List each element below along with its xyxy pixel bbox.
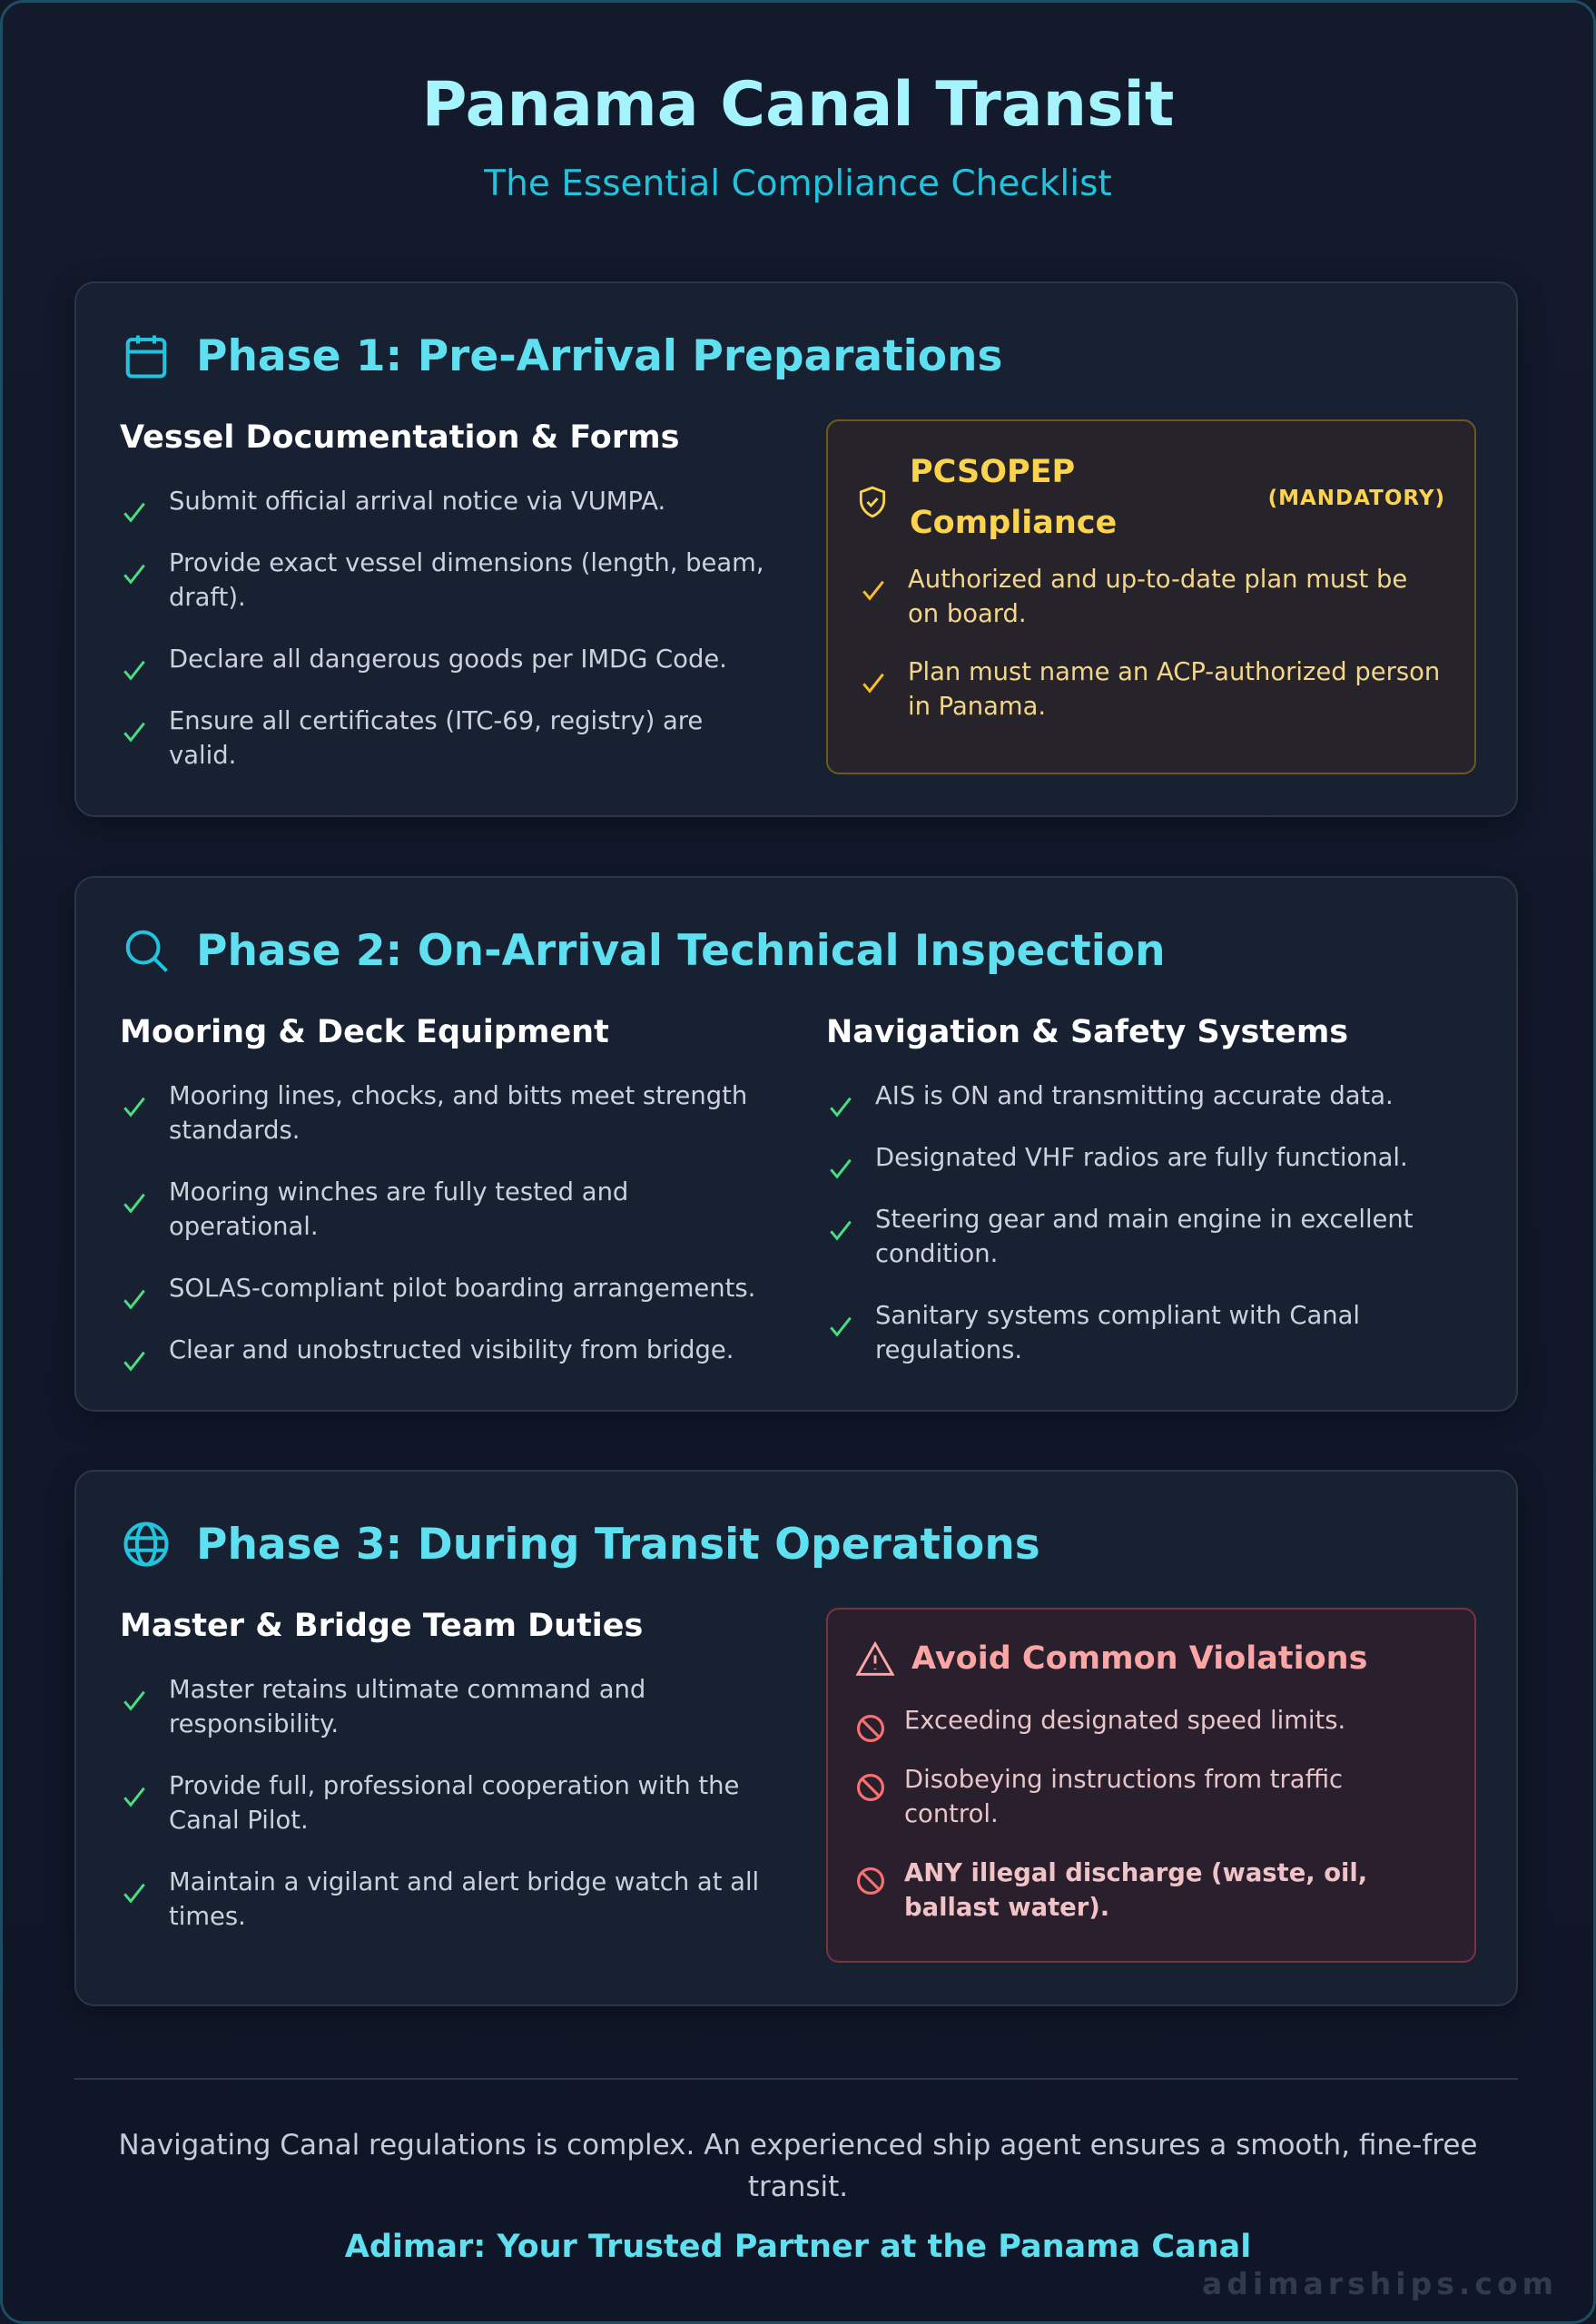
column: mooring: Mooring & Deck Equipment	[120, 1014, 609, 1050]
heading: phase 2: Phase 2: On-Arrival Technical Inspection	[196, 926, 1166, 975]
callout heading: (MANDATORY)	[1268, 487, 1445, 510]
column: master duties: Master & Bridge Team Duties	[120, 1608, 643, 1644]
callout: violations: Disobeying instructions from traffic	[904, 1766, 1343, 1794]
column: master duties: Provide full, professional cooperation with the Canal Pilot.	[169, 1772, 739, 1835]
column: navigation: Steering gear and main engine in excellent condition.	[875, 1206, 1414, 1268]
column: mooring: Clear and unobstructed visibility from bridge.	[169, 1336, 734, 1364]
panel: phase 2	[74, 876, 1518, 1412]
column: navigation: Designated VHF radios are fully functional.	[875, 1144, 1408, 1172]
callout: PCSOPEP: on board.	[908, 600, 1027, 628]
tagline: Adimar: Your Trusted Partner at the Panama Canal	[345, 2229, 1251, 2265]
panel: phase 3	[74, 1470, 1518, 2006]
column: vessel documentation	[120, 419, 764, 770]
column: mooring	[120, 1014, 755, 1371]
callout: violations	[826, 1608, 1476, 1963]
column: mooring: Mooring lines, chocks, and bitts meet strength standards.	[169, 1082, 747, 1145]
footer text: Navigating Canal regulations is complex. An experienced ship agent ensures a smooth, fine-free transit.	[119, 2129, 1477, 2203]
subtitle: The Essential Compliance Checklist	[484, 163, 1112, 204]
callout heading: PCSOPEP	[910, 454, 1075, 490]
callout: violations: control.	[904, 1800, 999, 1828]
callout: PCSOPEP: Authorized and up-to-date plan must be	[908, 566, 1407, 594]
callout: PCSOPEP: Plan must name an ACP-authorized person	[908, 658, 1440, 686]
callout heading: Compliance	[910, 505, 1117, 541]
column: navigation: Navigation & Safety Systems	[826, 1014, 1348, 1050]
column: vessel documentation: Submit official arrival notice via VUMPA.	[169, 487, 665, 516]
column: vessel documentation: Vessel Documentation & Forms	[120, 419, 679, 456]
callout: PCSOPEP: in Panama.	[908, 693, 1046, 721]
column: master duties: Maintain a vigilant and alert bridge watch at all times.	[169, 1868, 759, 1931]
callout: violations: ballast water).	[904, 1894, 1109, 1922]
watermark: adimarships.com	[1202, 2266, 1558, 2301]
heading: phase 3: Phase 3: During Transit Operations	[196, 1520, 1040, 1569]
column: mooring: SOLAS-compliant pilot boarding arrangements.	[169, 1275, 755, 1303]
title: Panama Canal Transit	[422, 69, 1174, 141]
column: navigation	[826, 1014, 1414, 1364]
column: master duties: Master retains ultimate command and responsibility.	[169, 1676, 645, 1738]
heading: phase 1: Phase 1: Pre-Arrival Preparations	[196, 330, 1002, 381]
column: vessel documentation: Declare all dangerous goods per IMDG Code.	[169, 645, 727, 674]
callout heading: Avoid Common Violations	[911, 1640, 1367, 1677]
column: navigation: AIS is ON and transmitting accurate data.	[875, 1082, 1394, 1110]
column: vessel documentation: Ensure all certificates (ITC-69, registry) are valid.	[169, 707, 703, 770]
callout: PCSOPEP	[826, 419, 1476, 774]
callout: violations: Exceeding designated speed limits.	[904, 1707, 1345, 1735]
panel: phase 1	[74, 281, 1518, 817]
column: mooring: Mooring winches are fully tested and operational.	[169, 1178, 628, 1241]
column: navigation: Sanitary systems compliant with Canal regulations.	[875, 1302, 1360, 1364]
column: vessel documentation: Provide exact vessel dimensions (length, beam, draft).	[169, 549, 764, 612]
column: master duties	[120, 1608, 759, 1931]
callout heading	[859, 454, 1445, 541]
callout: violations: ANY illegal discharge (waste, oil,	[904, 1859, 1367, 1887]
